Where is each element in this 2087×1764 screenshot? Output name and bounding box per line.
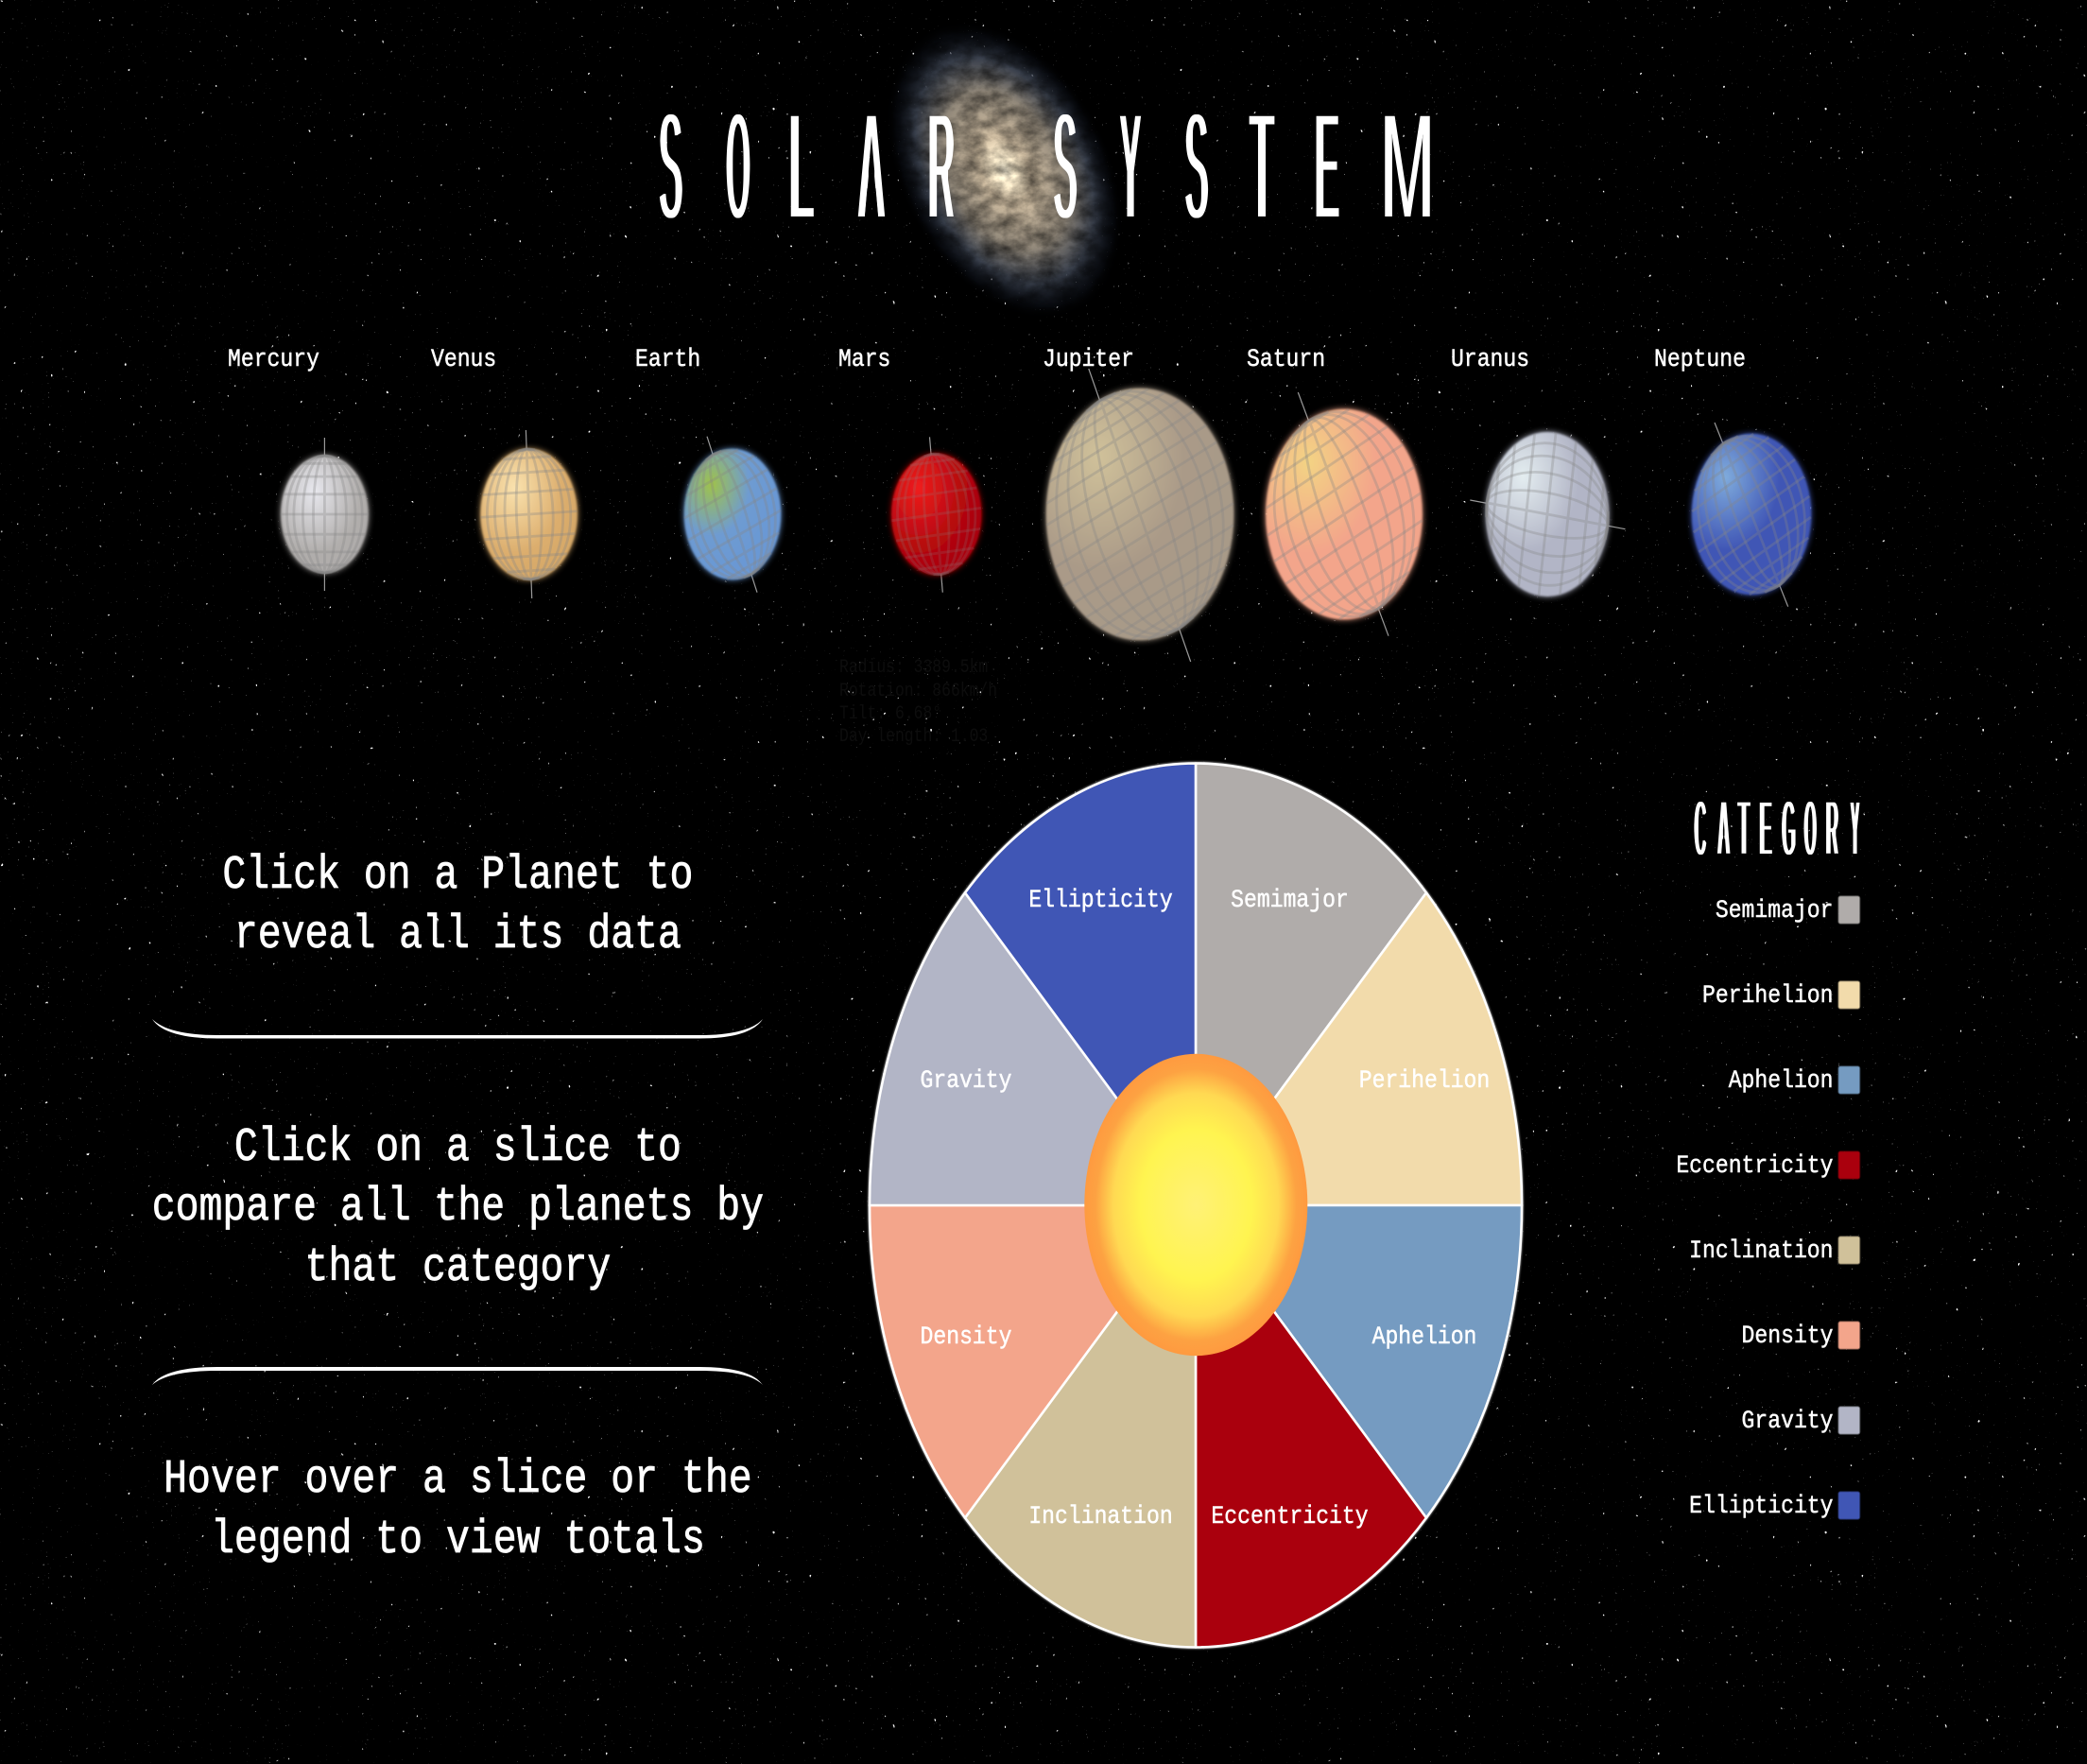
title: M (1381, 78, 1434, 256)
legend heading (1694, 802, 1860, 855)
faint planet data tooltip: Rotation: 866km/h (839, 682, 997, 702)
title: A (857, 78, 886, 256)
slice labels: Semimajor (1231, 885, 1349, 915)
planet: Earth (635, 344, 796, 600)
planet: Jupiter: Jupiter (1043, 344, 1134, 374)
slice labels: Perihelion (1359, 1065, 1490, 1096)
planet: Mars (838, 344, 986, 593)
planet: Saturn (1239, 344, 1449, 655)
instruction: hover: Hover over a slice or the (164, 1453, 752, 1506)
slice labels: Gravity (921, 1065, 1011, 1096)
slice labels: Aphelion (1372, 1322, 1476, 1352)
legend heading: E (1759, 784, 1772, 874)
legend heading: A (1717, 784, 1730, 874)
planet: Mercury (228, 344, 368, 591)
planet: Venus: Venus (431, 344, 496, 374)
instruction: click a planet: reveal all its data (234, 908, 681, 961)
legend: Ellipticity (1689, 1491, 1834, 1521)
legend heading: R (1826, 783, 1838, 874)
slice: Aphelion (1196, 1205, 1522, 1518)
instruction: click a slice (152, 1121, 764, 1294)
title: S (1053, 77, 1078, 255)
instruction: hover (164, 1453, 752, 1566)
title: E (1315, 77, 1339, 255)
legend heading: T (1738, 784, 1750, 874)
planet: Mercury: Mercury (228, 344, 319, 374)
slice: Density (870, 1205, 1196, 1518)
faint planet data tooltip: Day length: 1.03 (839, 727, 988, 748)
instruction: click a planet: Click on a Planet to (222, 849, 693, 902)
title: S (659, 77, 682, 255)
instruction: click a slice: that category (305, 1241, 611, 1294)
title: L (789, 78, 814, 256)
legend heading: G (1782, 784, 1796, 874)
planet: Neptune: Neptune (1654, 344, 1746, 374)
slice: Inclination (965, 1205, 1196, 1647)
divider: top (152, 1019, 763, 1038)
legend heading: C (1695, 783, 1706, 874)
title: R (928, 77, 955, 255)
legend: Semimajor (1716, 895, 1834, 925)
planet: Earth: Earth (635, 344, 700, 374)
planet: Saturn: Saturn (1247, 344, 1325, 374)
legend: Eccentricity (1676, 1150, 1834, 1181)
instruction: hover: legend to view totals (211, 1513, 705, 1566)
faint planet data tooltip: Tilt: 6.68° (839, 704, 941, 725)
planet: Neptune (1654, 344, 1832, 623)
slice labels: Inclination (1028, 1501, 1173, 1531)
slice: Gravity (870, 892, 1196, 1205)
galaxy image behind title (835, 0, 1175, 363)
faint planet data tooltip: Radius: 3389.5km (839, 658, 988, 679)
title: S (1184, 77, 1209, 255)
title: T (1250, 78, 1274, 256)
legend heading: Y (1851, 783, 1859, 875)
pie chart: planet categories (870, 763, 1522, 1647)
slice labels: Density (921, 1322, 1011, 1352)
slice labels (921, 885, 1490, 1531)
legend: Gravity (1742, 1406, 1834, 1436)
faint planet data tooltip (839, 658, 997, 748)
instruction: click a slice: compare all the planets by (152, 1181, 764, 1234)
planet: Uranus: Uranus (1451, 344, 1529, 374)
instruction: click a planet (222, 849, 693, 961)
slice: Perihelion (1196, 892, 1522, 1205)
legend: Density (1742, 1321, 1834, 1351)
sun (1084, 1054, 1307, 1356)
planet: Uranus (1451, 344, 1626, 607)
legend: Aphelion (1729, 1065, 1834, 1096)
title: O (726, 77, 750, 255)
slice: Semimajor (1196, 763, 1426, 1205)
planet: Mars: Mars (838, 344, 890, 374)
legend: Perihelion (1702, 980, 1834, 1011)
instruction: click a slice: Click on a slice to (234, 1121, 681, 1174)
legend heading: O (1804, 783, 1817, 874)
planet: Jupiter (1015, 344, 1265, 682)
legend (1676, 895, 1859, 1521)
title (660, 114, 1430, 218)
slice labels: Ellipticity (1028, 885, 1173, 915)
title: Y (1119, 76, 1142, 255)
slice labels: Eccentricity (1211, 1501, 1369, 1531)
legend: Inclination (1689, 1236, 1834, 1266)
planet: Venus (431, 344, 579, 598)
divider: bottom (152, 1367, 763, 1385)
slice: Ellipticity (965, 763, 1196, 1205)
slice: Eccentricity (1196, 1205, 1426, 1647)
